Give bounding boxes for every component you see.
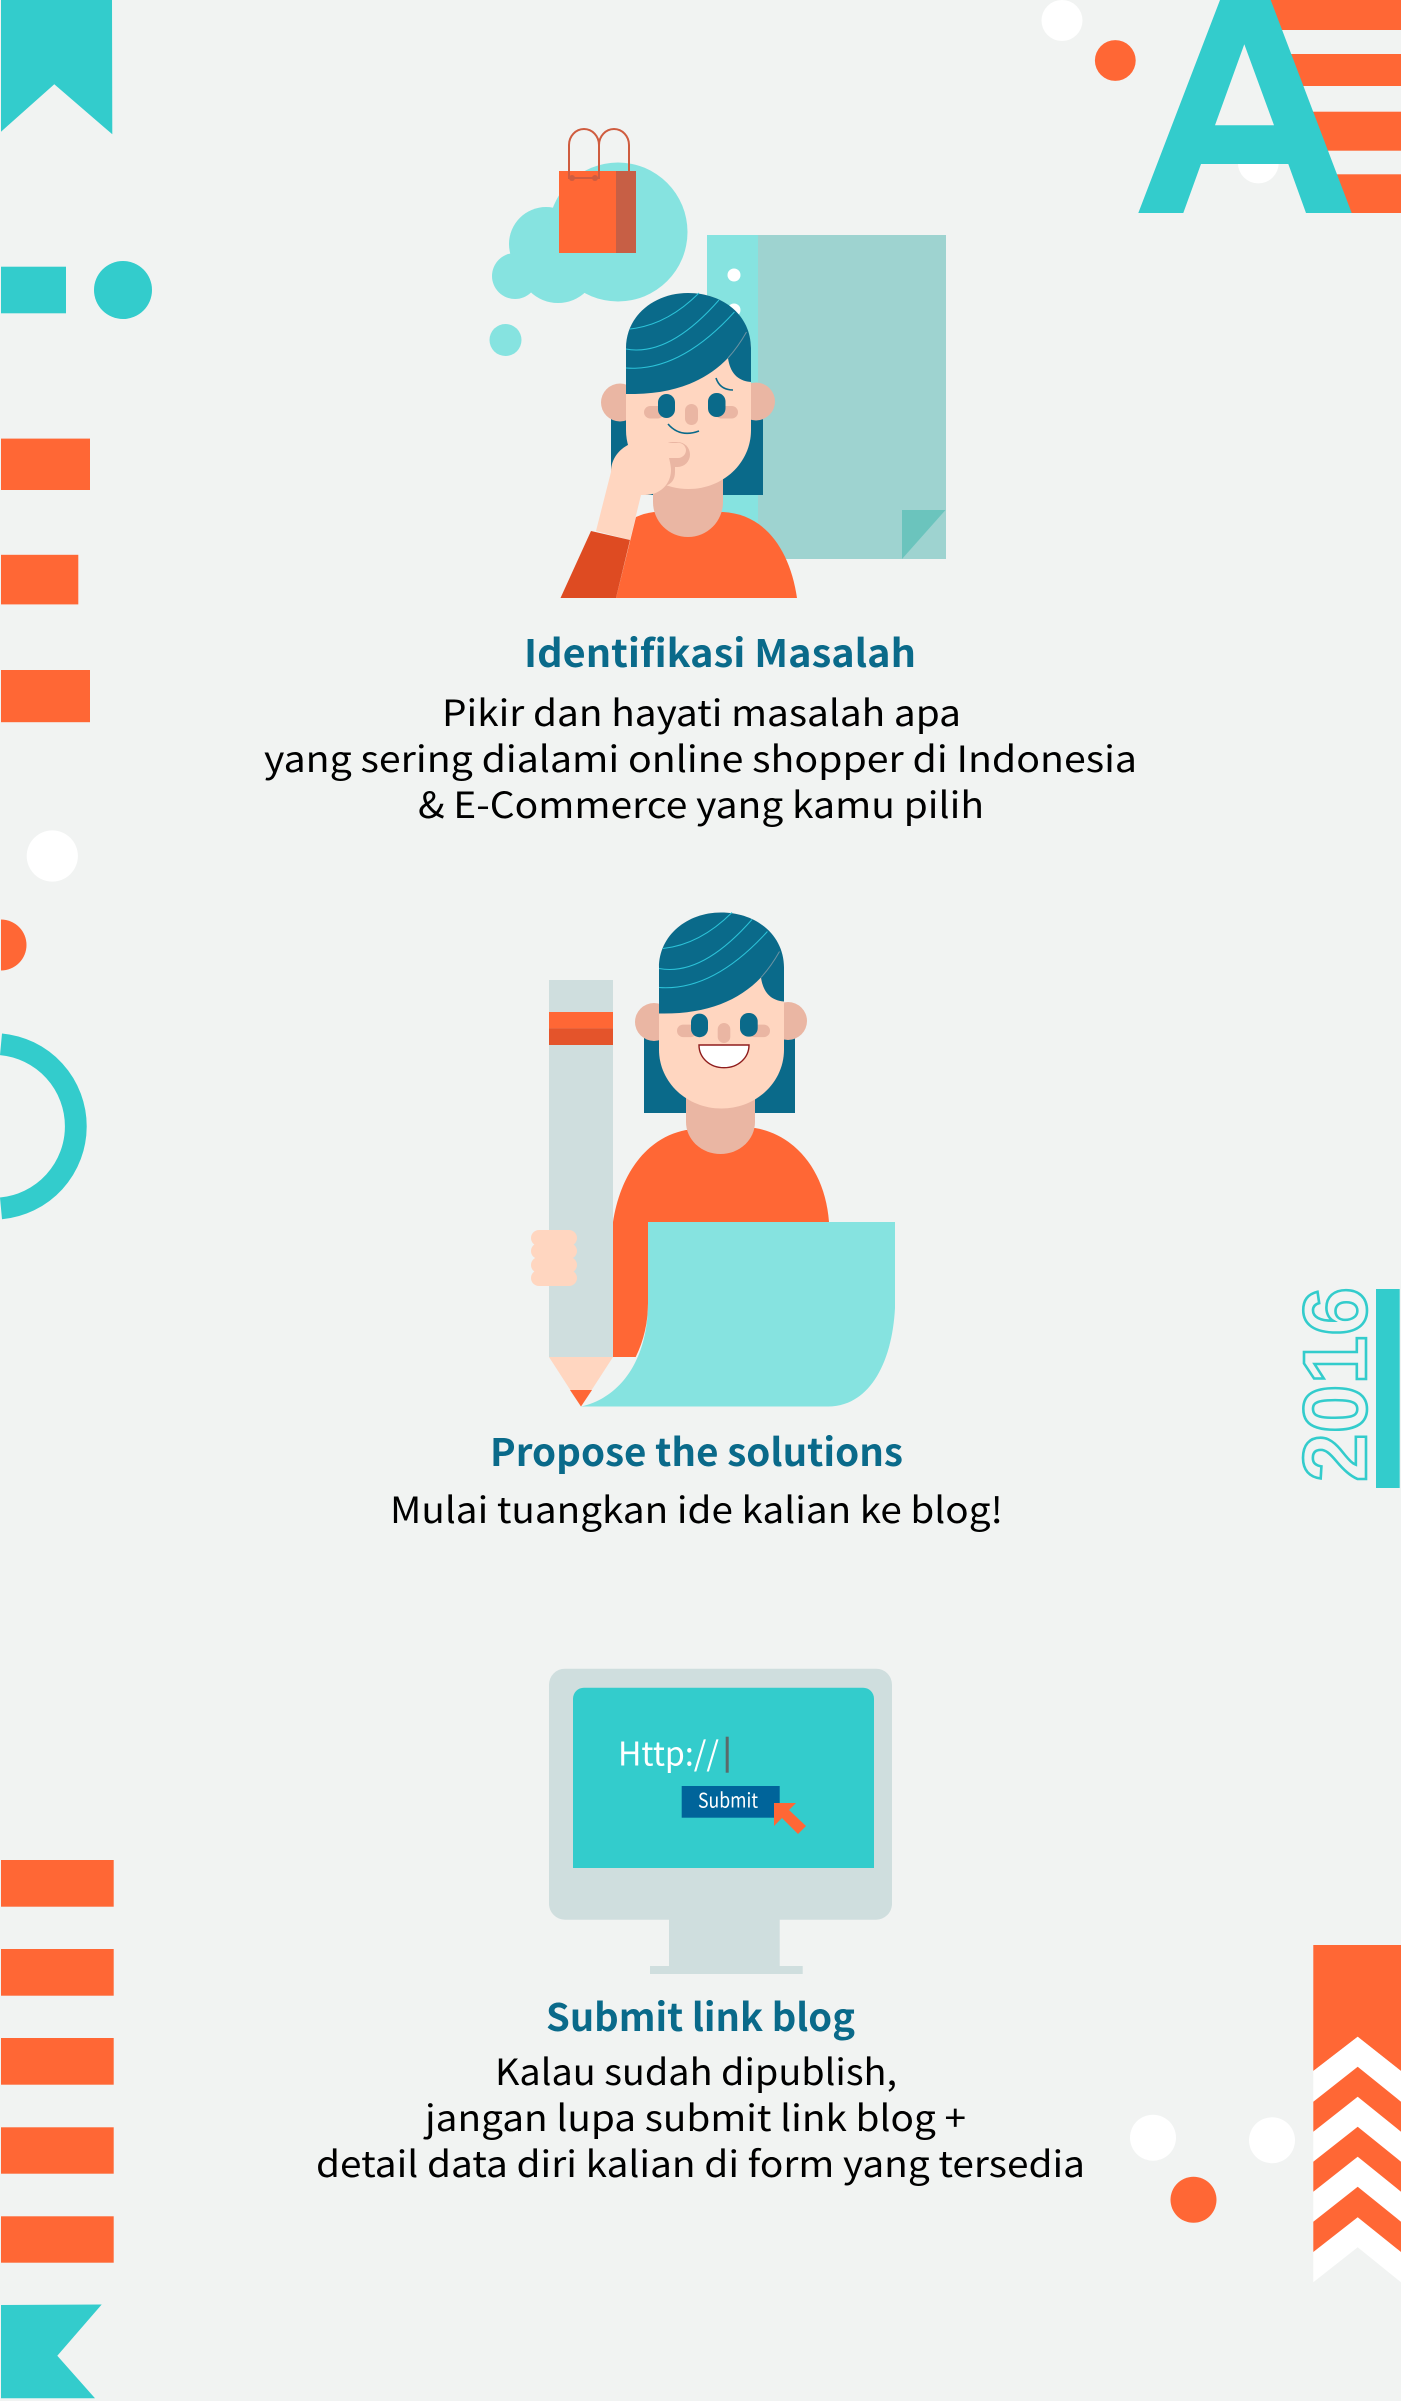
text block: solutions description: Mulai tuangkan ide kalian ke blog! bbox=[390, 1482, 1003, 1534]
teal rectangle bbox=[1, 267, 66, 313]
illustration: computer monitor with submit form bbox=[549, 1669, 892, 1974]
side label: 2016: 2016 bbox=[1286, 1287, 1386, 1482]
ribbon: bottom-left teal bbox=[1, 2304, 102, 2398]
monitor screen bbox=[573, 1688, 874, 1868]
text block: submission description: detail data diri kalian di form yang tersedia bbox=[316, 2136, 1085, 2188]
white circle: left bbox=[27, 830, 78, 882]
icon: arrow cursor bbox=[774, 1803, 806, 1834]
icon: notebook page bbox=[707, 235, 946, 559]
icon: curled paper bbox=[581, 1222, 895, 1406]
heading: Propose the solutions: Propose the solutions bbox=[490, 1422, 903, 1477]
orange half circle: left bbox=[1, 920, 26, 970]
button: Submit bbox=[682, 1785, 780, 1818]
orange bars: upper left bbox=[1, 439, 90, 722]
icon: shopping bag bbox=[559, 129, 636, 253]
teal circle bbox=[94, 261, 152, 319]
illustration: smiling woman with pencil and paper bbox=[531, 912, 895, 1406]
teal ring: left bbox=[1, 1044, 76, 1208]
text block: problem description: & E-Commerce yang kamu pilih bbox=[418, 777, 984, 829]
figure: smiling woman bbox=[613, 912, 829, 1357]
circles: bottom-right bbox=[1130, 2115, 1295, 2223]
text block: problem description bbox=[264, 685, 1137, 829]
orange bars: lower left bbox=[1, 1860, 114, 2263]
text block: problem description: Pikir dan hayati masalah apa bbox=[442, 685, 961, 737]
icon: thought cloud bbox=[490, 162, 688, 356]
figure: woman thinking bbox=[560, 293, 797, 598]
icon: hand on pencil bbox=[531, 1230, 577, 1286]
text block: submission description: jangan lupa submit link blog + bbox=[423, 2090, 966, 2142]
illustration: thinking woman with shopping bag bbox=[490, 129, 946, 598]
icon: monitor body bbox=[549, 1669, 892, 1974]
decoration: top-right circles, stripes and letter A bbox=[1042, 0, 1401, 213]
heading: Identifikasi Masalah: Identifikasi Masalah bbox=[524, 623, 916, 678]
ribbon: top-left teal bbox=[1, 0, 112, 134]
icon: pencil bbox=[549, 980, 613, 1406]
text cursor bbox=[726, 1737, 729, 1773]
text block: submission description bbox=[316, 2044, 1085, 2188]
text block: problem description: yang sering dialami online shopper di Indonesia bbox=[264, 731, 1137, 783]
button: Submit: Submit bbox=[698, 1785, 758, 1814]
text block: submission description: Kalau sudah dipublish, bbox=[495, 2044, 897, 2096]
heading: Submit link blog: Submit link blog bbox=[546, 1987, 855, 2042]
text: url field: Http:// bbox=[618, 1728, 719, 1776]
ribbon: bottom-right chevrons bbox=[1313, 1945, 1401, 2282]
